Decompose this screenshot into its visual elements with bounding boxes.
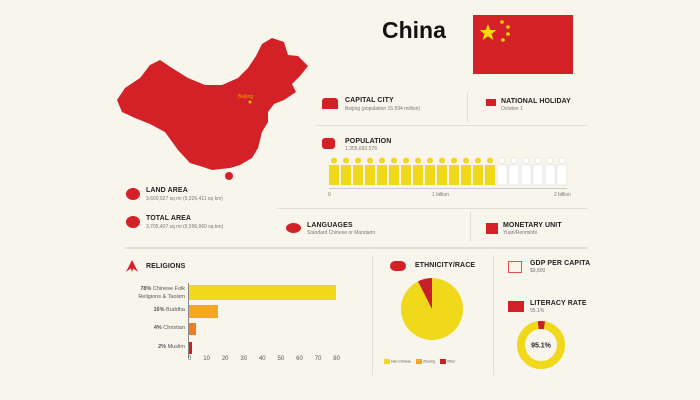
literacy rate — [508, 300, 587, 314]
languages: Standard Chinese or Mandarin — [307, 230, 375, 236]
religions: 10 — [203, 356, 210, 362]
population — [322, 138, 571, 198]
population: 0 — [328, 192, 331, 198]
land area: LAND AREA — [146, 187, 188, 194]
religions: 30 — [240, 356, 247, 362]
religions: 70 — [315, 356, 321, 362]
monetary unit — [486, 222, 562, 236]
capital city: CAPITAL CITY — [345, 97, 394, 104]
national holiday: October 1 — [501, 106, 523, 112]
GDP per capita: GDP PER CAPITA — [530, 260, 590, 267]
total area — [126, 215, 223, 230]
population: 1 billion — [432, 192, 449, 198]
religions: 60 — [296, 356, 303, 362]
population: 1,355,692,576 — [345, 146, 377, 152]
monetary unit: Yuan/Renminbi — [503, 230, 537, 236]
religions: 16% Buddha — [153, 307, 185, 313]
map of China — [117, 38, 308, 180]
religions: 2% Muslim — [158, 344, 185, 350]
GDP per capita — [508, 260, 590, 274]
religions: 4% Christian — [154, 325, 185, 331]
capital city: Beijing (population 15.594 million) — [345, 106, 420, 112]
monetary unit: MONETARY UNIT — [503, 222, 562, 229]
literacy donut: 95.1% — [531, 342, 552, 350]
ethnicity/race: Han Chinese Zhuang Other — [391, 359, 456, 363]
flag — [473, 15, 573, 74]
religions: 78% Chinese Folk — [140, 286, 185, 292]
literacy rate: 95.1% — [530, 308, 544, 314]
dividers — [315, 125, 588, 126]
GDP per capita: $9,800 — [530, 268, 545, 274]
literacy donut — [517, 321, 565, 369]
capital city — [322, 97, 420, 112]
land area: 3,600,927 sq mi (9,326,411 sq km) — [146, 196, 223, 202]
religions: 40 — [259, 356, 266, 362]
languages: LANGUAGES — [307, 222, 353, 229]
population: POPULATION — [345, 138, 391, 145]
ethnicity/race: ETHNICITY/RACE — [415, 262, 475, 269]
religions: RELIGIONS — [146, 263, 185, 270]
land area — [126, 187, 223, 202]
population: 2 billion — [554, 192, 571, 198]
title: China — [382, 17, 446, 43]
national holiday — [486, 98, 571, 112]
religions: 80 — [333, 356, 340, 362]
total area: 3,705,407 sq mi (9,596,960 sq km) — [146, 224, 223, 230]
religions — [126, 260, 340, 362]
literacy rate: LITERACY RATE — [530, 300, 587, 307]
languages — [286, 222, 375, 236]
religions: Religions & Taoism — [138, 294, 185, 300]
religions: 0 — [188, 356, 191, 362]
ethnicity/race — [384, 261, 475, 364]
national holiday: NATIONAL HOLIDAY — [501, 98, 571, 105]
religions: 50 — [278, 356, 284, 362]
total area: TOTAL AREA — [146, 215, 191, 222]
map of China: Beijing — [238, 94, 253, 100]
religions: 20 — [222, 356, 228, 362]
